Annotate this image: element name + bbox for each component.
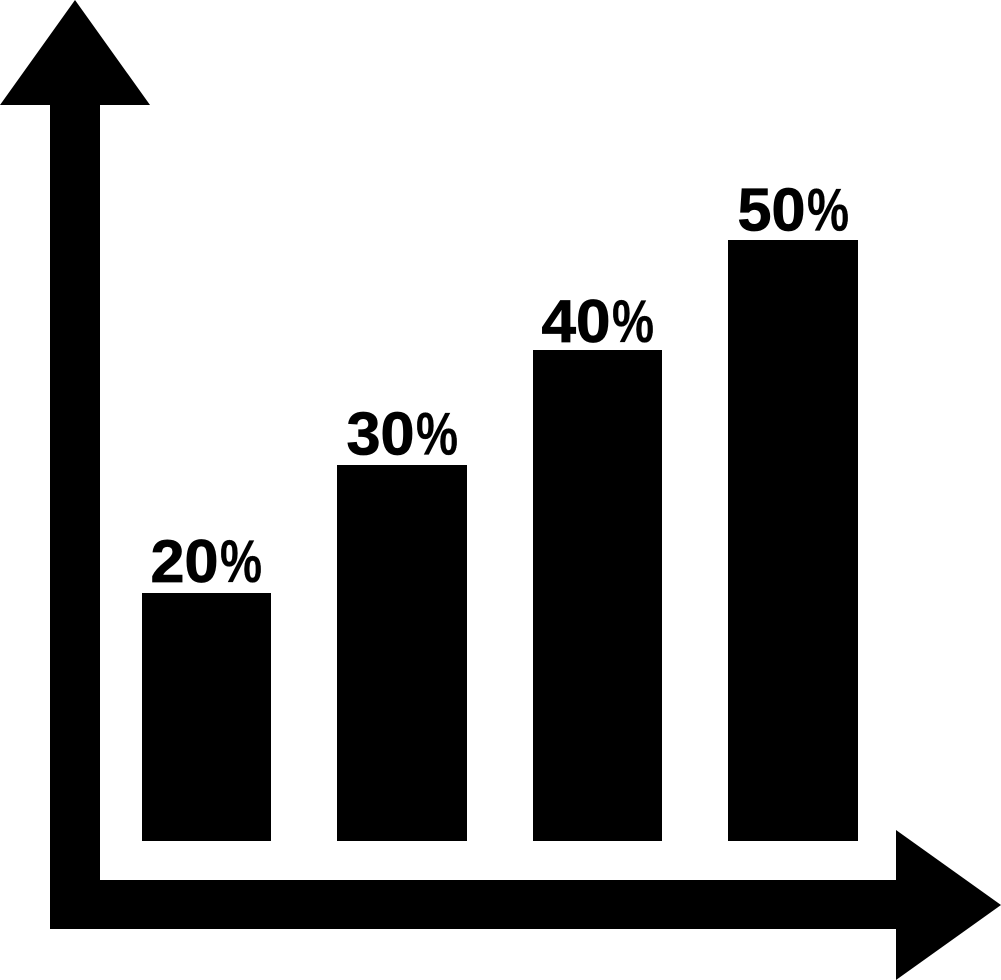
y axis arrow — [0, 0, 150, 880]
x axis arrow — [50, 830, 1001, 980]
bar: 50%: % — [807, 176, 849, 244]
bar: 40%: 40 — [542, 288, 610, 355]
bar: 30%: 30 — [346, 400, 414, 468]
bar: 50%: 50 — [738, 176, 806, 244]
bar: 50% — [728, 176, 858, 841]
bar: 20% — [142, 528, 271, 841]
bar: 30% — [337, 400, 467, 841]
bar: 20%: 20 — [150, 528, 218, 595]
bar: 20%: % — [220, 528, 262, 595]
bar: 40%: % — [612, 288, 654, 355]
bar: 30%: % — [416, 400, 458, 468]
bar: 40% — [533, 288, 662, 841]
